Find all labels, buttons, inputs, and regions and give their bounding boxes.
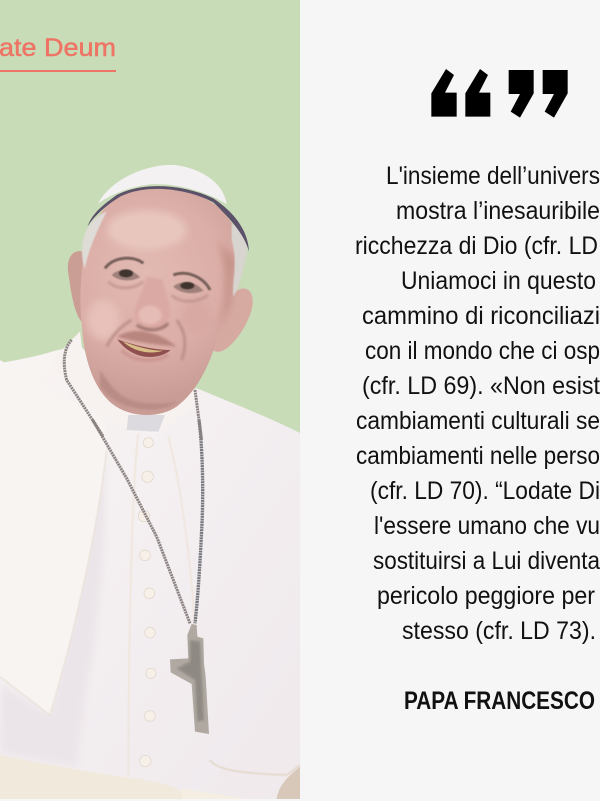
collar front [127,415,165,432]
lower right sleeve [277,767,300,799]
pectoral cross [170,624,209,734]
left cape [0,360,107,715]
forehead highlight [107,210,187,250]
hair left [82,212,107,268]
cassock placket [128,433,195,777]
collar [52,332,195,431]
zucchetto [98,165,227,204]
left ear [68,251,92,322]
robe details [0,360,300,799]
heading: Laudate Deum: ate Deum [0,34,116,62]
eyebrows [105,258,143,268]
eyes [112,270,140,280]
panel: green photo background [0,0,300,799]
teeth [123,341,163,353]
mouth [117,339,171,357]
eye bags [108,282,208,301]
cap edge dark [87,186,249,252]
jaw shadow [100,370,178,410]
nose [134,277,170,328]
upper lip shadow [117,331,177,347]
icon: quotation marks [431,69,568,118]
photo: Pope Francis [0,165,300,799]
cheek highlights [87,300,120,340]
text block: quotation [355,162,600,645]
chain lower [93,420,190,623]
hair right [232,223,247,297]
cape edge [0,450,107,715]
smile folds [107,320,185,360]
heading: Laudate Deum [0,34,116,72]
right cape [210,760,300,775]
head [52,165,253,440]
sash [0,755,190,799]
right ear [212,288,253,352]
lower lip [122,350,168,360]
panel: right background [300,0,600,801]
face [80,186,240,415]
chain upper [64,340,103,437]
buttons [138,438,156,767]
robe: shoulders and cassock [0,345,300,799]
cape shadow [0,453,106,767]
temple shadow [213,240,237,340]
